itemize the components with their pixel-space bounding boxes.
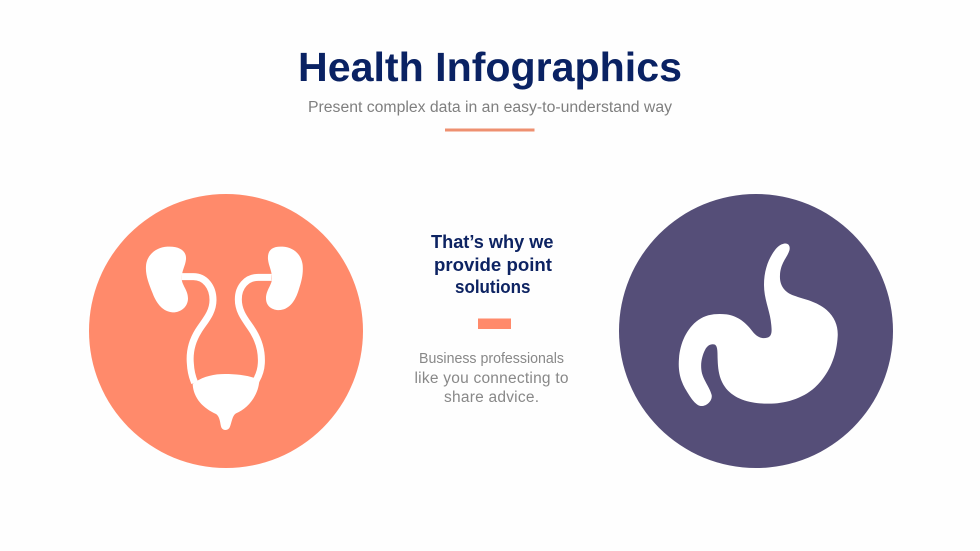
body text: share advice. bbox=[444, 389, 539, 406]
panel: kidneys and bladder bbox=[89, 194, 363, 468]
panel: stomach bbox=[619, 194, 893, 468]
ureters bbox=[182, 277, 272, 383]
subheading: provide point bbox=[434, 254, 552, 275]
title underline accent bbox=[445, 128, 534, 132]
subheading: solutions bbox=[455, 276, 530, 297]
icon: stomach bbox=[679, 243, 838, 406]
subheading: That’s why we bbox=[431, 231, 554, 252]
body text bbox=[414, 351, 568, 406]
subtitle: Present complex data in an easy-to-understand way bbox=[308, 99, 672, 116]
subheading bbox=[431, 231, 554, 297]
orange circle bbox=[89, 194, 363, 468]
center accent bar bbox=[478, 318, 511, 329]
icon: urinary system bbox=[146, 247, 303, 430]
purple circle bbox=[619, 194, 893, 468]
body text: like you connecting to bbox=[414, 370, 568, 387]
title: Health Infographics bbox=[298, 44, 682, 90]
body text: Business professionals bbox=[419, 351, 564, 367]
left kidney bbox=[146, 247, 188, 312]
right kidney bbox=[266, 247, 303, 310]
bladder bbox=[193, 374, 259, 430]
